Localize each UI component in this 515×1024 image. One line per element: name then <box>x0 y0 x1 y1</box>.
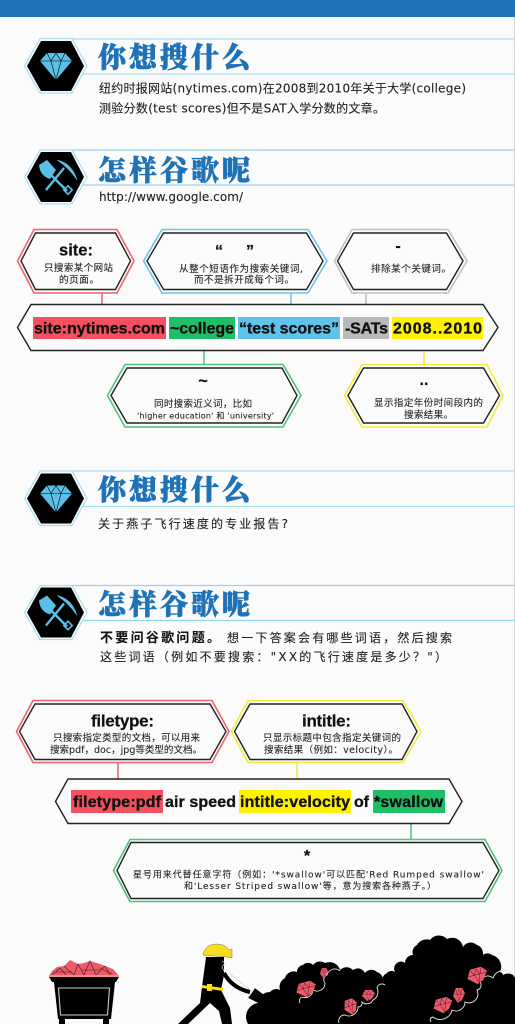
callout: filetype: filetype: <box>91 712 154 730</box>
heading: 怎样谷歌呢 <box>98 154 250 187</box>
ruby pile <box>49 960 119 976</box>
callout: range: 搜索结果。 <box>404 409 453 421</box>
heading: 怎样谷歌呢 <box>98 588 250 621</box>
illustration: mine cart <box>49 960 119 1024</box>
search query bar 1: -SATs <box>345 320 388 338</box>
callout: filetype: 只搜索指定类型的文档，可以用来 <box>53 732 200 744</box>
description text: 想一下答案会有哪些词语，然后搜索 <box>227 630 452 645</box>
callout: range <box>344 364 503 427</box>
description text: 不要问谷歌问题。 <box>100 630 220 646</box>
description text: 纽约时报网站(nytimes.com)在2008到2010年关于大学(college) <box>99 80 466 96</box>
search query bar 1 <box>18 304 498 350</box>
callout: range: 显示指定年份时间段内的 <box>374 397 483 409</box>
icon: shovel and pick hexagon <box>24 150 87 204</box>
callout: wildcard <box>114 840 502 902</box>
rubies in mound <box>294 965 490 1017</box>
callout: quotes <box>144 230 327 293</box>
connectors top <box>101 293 103 304</box>
heading: 你想搜什么 <box>98 474 253 506</box>
callout: wildcard: 和'Lesser Striped swallow'等，意为搜索各种燕子。） <box>184 880 436 892</box>
search query bar 2: of <box>354 794 370 811</box>
icon: diamond hexagon <box>24 471 87 526</box>
section 1: what to search <box>24 38 515 116</box>
callout: minus: - <box>395 238 401 255</box>
callout: site <box>18 230 134 293</box>
callout: filetype <box>16 700 229 762</box>
search query bar 1: “test scores” <box>239 320 339 338</box>
callout: site: site: <box>59 242 93 260</box>
callout: minus: 排除某个关键词。 <box>371 263 451 275</box>
section 4: how to google <box>24 586 515 664</box>
callout: minus <box>334 230 467 293</box>
description text: 关于燕子飞行速度的专业报告? <box>98 516 288 531</box>
search query bar 2: filetype:pdf <box>73 794 162 811</box>
callout: site: 只搜索某个网站 <box>44 262 113 274</box>
description text <box>100 630 452 664</box>
search query bar 2: air speed <box>165 794 236 811</box>
callout: range: .. <box>420 372 428 389</box>
search query bar 2 <box>56 779 462 824</box>
callout: wildcard: 星号用来代替任意字符（例如：'*swallow'可以匹配'Red Rumped swallow' <box>133 868 484 880</box>
callout: tilde <box>108 364 301 427</box>
connectors bottom <box>117 763 119 779</box>
callout: intitle: intitle: <box>302 712 351 730</box>
description text: 测验分数(test scores)但不是SAT入学分数的文章。 <box>99 100 385 116</box>
search query bar 1: 2008..2010 <box>393 320 482 338</box>
search query bar 1: site:nytimes.com <box>34 320 165 338</box>
callout: tilde: ~ <box>198 373 208 390</box>
illustration: ore mounds <box>246 935 515 1024</box>
top bar <box>0 0 515 17</box>
callout: quotes: 从整个短语作为搜索关键词, <box>179 263 303 275</box>
callout: site: 的页面。 <box>59 274 99 286</box>
callout: quotes: ” <box>246 243 254 260</box>
callout: intitle: 搜索结果（例如：velocity）。 <box>264 744 398 756</box>
section 2: how to google <box>24 150 515 204</box>
callout: intitle: 只显示标题中包含指定关键词的 <box>263 732 401 744</box>
icon: shovel and pick hexagon <box>24 586 87 640</box>
illustration: miner <box>178 944 267 1024</box>
description text <box>99 80 466 116</box>
section 3: what to search <box>24 471 515 531</box>
callout: tilde: 'higher education' 和 'university' <box>137 412 274 420</box>
search query bar 2: *swallow <box>374 794 444 811</box>
description text: 这些词语（例如不要搜索："XX的飞行速度是多少？"） <box>100 649 447 664</box>
search query bar 2: intitle:velocity <box>240 794 350 811</box>
callout: quotes: 而不是拆开成每个词。 <box>194 274 294 286</box>
icon: diamond hexagon <box>24 38 87 93</box>
search query bar 1: ~college <box>170 320 234 338</box>
callout: intitle <box>232 700 421 762</box>
callout: quotes: “ <box>215 243 223 260</box>
callout: wildcard: * <box>304 848 311 865</box>
heading: 你想搜什么 <box>98 41 253 74</box>
callout: filetype: 搜索pdf，doc，jpg等类型的文档。 <box>50 744 202 756</box>
url text: http://www.google.com/ <box>99 190 244 204</box>
callout: tilde: 同时搜索近义词，比如 <box>154 398 252 410</box>
